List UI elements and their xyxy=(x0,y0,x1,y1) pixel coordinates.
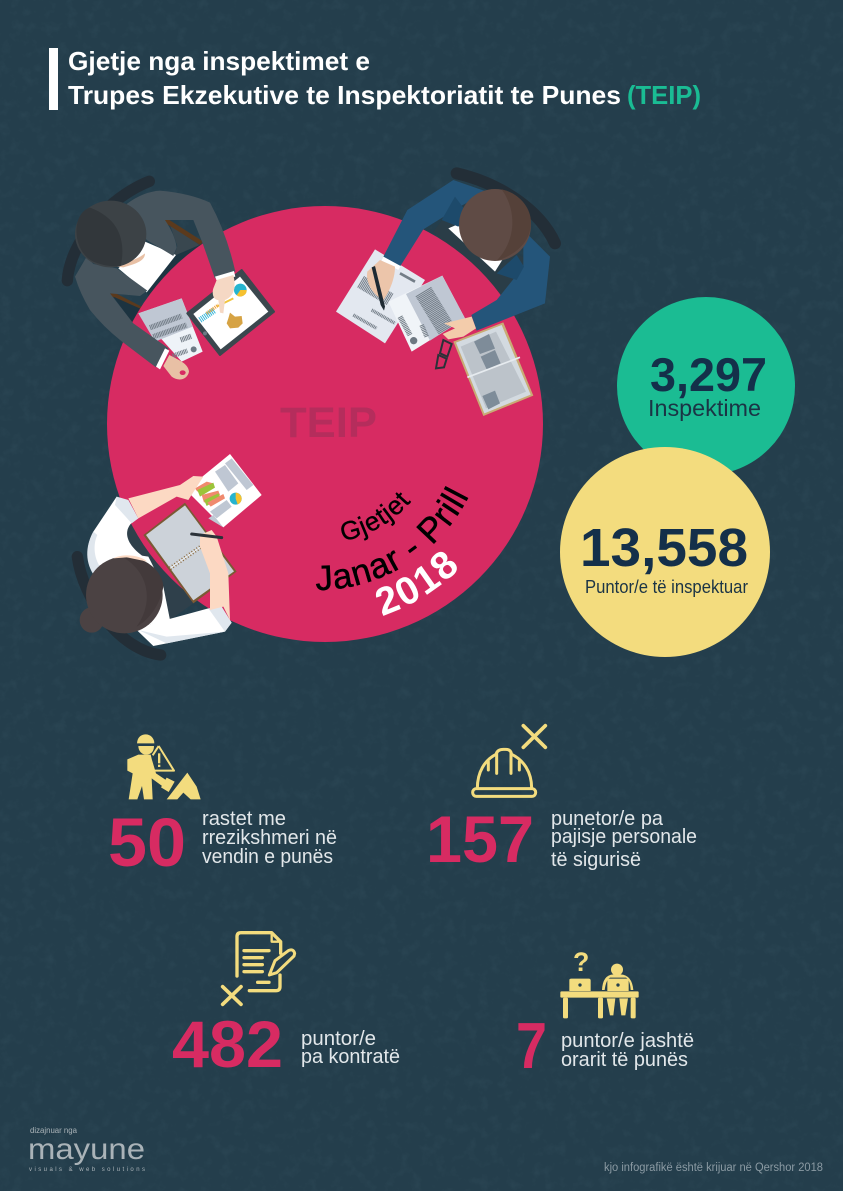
logo: designer credit: visuals & web solutions xyxy=(29,1167,145,1173)
stat: 7 outside working hours: orarit të punës xyxy=(561,1048,688,1071)
cuffs and hands xyxy=(156,271,235,379)
stat: 482 without contract: 482 xyxy=(172,1007,283,1081)
curved text: Gjetjet Janar - Prill 2018: 2018 xyxy=(376,552,457,616)
stat: 50 hazards xyxy=(108,734,337,881)
icon: desk with question mark xyxy=(560,947,639,1018)
stat circle: workers inspected xyxy=(560,447,770,657)
logo: designer credit: mayune xyxy=(28,1133,145,1166)
footer note: kjo infografikë është krijuar në Qershor 2018 xyxy=(604,1162,823,1174)
person: grey suit with tablet xyxy=(75,191,274,379)
stat circle: workers inspected: Puntor/e të inspektuar xyxy=(585,577,748,597)
head xyxy=(80,555,163,633)
stat circle: inspections: Inspektime xyxy=(648,395,761,421)
stat: 50 hazards: vendin e punës xyxy=(202,845,333,868)
stat circle: inspections xyxy=(617,297,795,475)
suit arms xyxy=(75,191,235,367)
table xyxy=(107,206,543,642)
person: woman with notebook xyxy=(80,454,262,646)
glasses xyxy=(436,340,452,368)
chart paper xyxy=(186,454,262,527)
stat: 157 no protective equipment: të sigurisë xyxy=(551,848,641,871)
stat: 157 no protective equipment xyxy=(426,726,697,876)
stat: 50 hazards: rastet me xyxy=(202,807,286,830)
arms xyxy=(128,476,230,620)
blouse xyxy=(87,497,232,646)
stat circle: inspections: 3,297 xyxy=(650,348,767,401)
magazine xyxy=(453,322,533,416)
curved text: Gjetjet Janar - Prill 2018: Gjetjet xyxy=(341,492,412,541)
hands and pen xyxy=(367,257,476,339)
stat circle: workers inspected: 13,558 xyxy=(580,518,748,578)
title: Gjetje nga inspektimet e xyxy=(68,46,370,76)
stat: 482 without contract xyxy=(172,933,400,1081)
right paper xyxy=(388,276,465,352)
head xyxy=(459,189,531,261)
stat: 157 no protective equipment: 157 xyxy=(426,802,534,876)
notebook xyxy=(143,503,237,603)
curved text: Gjetjet Janar - Prill 2018: Janar - Prill xyxy=(316,486,468,590)
person bodies and chairs under the table xyxy=(67,173,555,655)
tablet xyxy=(187,270,274,355)
stat: 482 without contract: puntor/e xyxy=(301,1027,376,1050)
stat: 50 hazards: 50 xyxy=(108,804,186,881)
logo: designer credit xyxy=(28,1126,145,1173)
stat: 7 outside working hours: 7 xyxy=(516,1009,547,1082)
stat: 482 without contract: pa kontratë xyxy=(301,1045,400,1068)
icon: worker with shovel and warning xyxy=(127,734,201,799)
icon: hard hat with cross xyxy=(473,726,545,796)
stat: 157 no protective equipment: punetor/e pa xyxy=(551,807,664,830)
stat: 157 no protective equipment: pajisje personale xyxy=(551,825,697,848)
icon: desk with question mark: ? xyxy=(573,947,589,977)
left paper xyxy=(336,249,425,343)
document on table xyxy=(138,298,203,362)
logo: designer credit: dizajnuar nga xyxy=(30,1126,78,1135)
title xyxy=(49,46,701,110)
pen xyxy=(192,534,222,538)
stat: 50 hazards: rrezikshmeri në xyxy=(202,826,337,849)
head xyxy=(75,201,146,267)
table label TEIP: TEIP xyxy=(280,399,377,447)
person: blue suit with papers xyxy=(336,180,550,416)
stat: 7 outside working hours: puntor/e jashtë xyxy=(561,1029,694,1052)
title: (TEIP) xyxy=(627,80,701,110)
stat: 7 outside working hours xyxy=(516,947,694,1082)
title: Trupes Ekzekutive te Inspektoriatit te Punes xyxy=(68,80,621,110)
icon: contract with cross xyxy=(223,933,295,1004)
suit arms xyxy=(383,180,550,331)
